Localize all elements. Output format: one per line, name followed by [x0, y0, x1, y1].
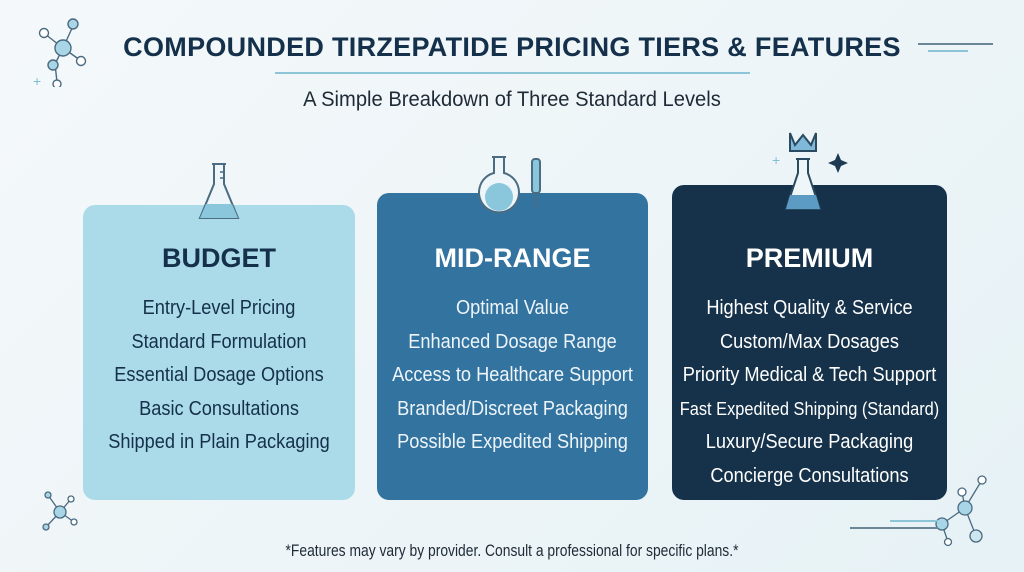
footnote: *Features may vary by provider. Consult a professional for specific plans.*: [286, 542, 738, 560]
features: budget: Shipped in Plain Packaging: [108, 431, 330, 453]
icon: flask budget: [198, 163, 240, 219]
icon: flask and dropper mid: [478, 156, 541, 214]
features: budget: Entry-Level Pricing: [143, 297, 295, 319]
icon: molecule bottom-right: [935, 475, 987, 546]
features: premium: Priority Medical & Tech Support: [683, 364, 936, 386]
icon: molecule bottom-left: [42, 491, 78, 531]
title: COMPOUNDED TIRZEPATIDE PRICING TIERS & FEATURES: [123, 32, 901, 62]
heading: premium: PREMIUM: [746, 243, 873, 273]
features: mid-range: Optimal Value: [456, 297, 569, 319]
features: premium: [680, 297, 939, 487]
features: budget: [108, 297, 330, 453]
features: premium: Fast Expedited Shipping (Standard): [680, 399, 939, 419]
heading: mid-range: MID-RANGE: [434, 243, 590, 273]
icon: crown flask premium: +: [772, 152, 780, 168]
decorative lines right: [918, 43, 993, 45]
features: budget: Standard Formulation: [131, 331, 307, 353]
features: premium: Custom/Max Dosages: [720, 331, 899, 353]
icon: crown flask premium: [772, 132, 848, 210]
icon: molecule top-left: [33, 18, 86, 87]
features: premium: Highest Quality & Service: [706, 297, 913, 319]
panel: budget: [83, 205, 355, 500]
heading: budget: BUDGET: [162, 243, 276, 273]
features: premium: Concierge Consultations: [710, 465, 909, 487]
panel: mid-range: [377, 193, 648, 500]
features: mid-range: Enhanced Dosage Range: [408, 331, 617, 353]
features: mid-range: [392, 297, 633, 453]
features: mid-range: Branded/Discreet Packaging: [397, 398, 628, 420]
features: budget: Basic Consultations: [139, 398, 299, 420]
features: premium: Luxury/Secure Packaging: [706, 431, 913, 453]
features: mid-range: Possible Expedited Shipping: [397, 431, 628, 453]
features: mid-range: Access to Healthcare Support: [392, 364, 633, 386]
panel: premium: [672, 185, 947, 500]
subtitle: A Simple Breakdown of Three Standard Levels: [303, 88, 721, 111]
features: budget: Essential Dosage Options: [114, 364, 324, 386]
